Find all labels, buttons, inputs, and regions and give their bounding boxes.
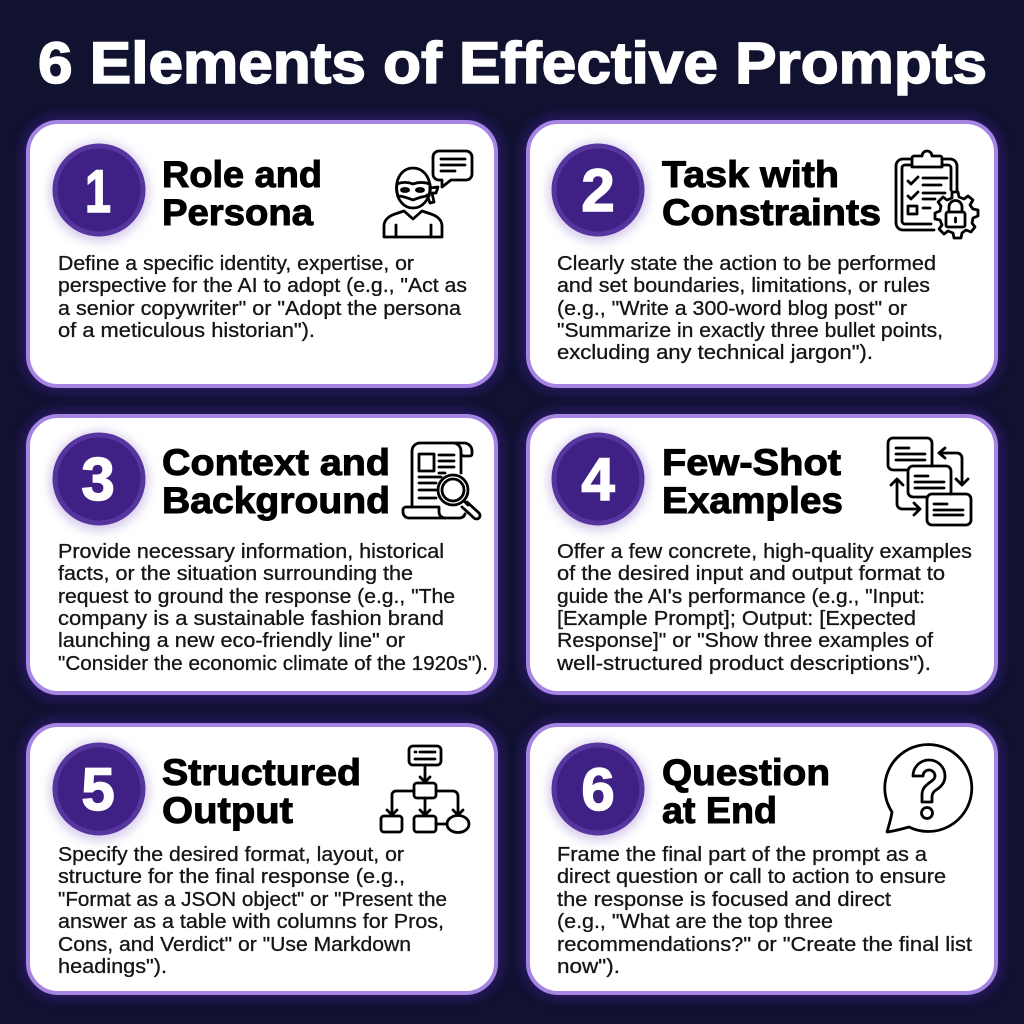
description text: answer as a table with columns for Pros, bbox=[58, 911, 444, 933]
heading: structured output bbox=[162, 752, 361, 831]
description text: facts, or the situation surrounding the bbox=[58, 563, 413, 585]
description text: direct question or call to action to ensure bbox=[557, 866, 946, 888]
description text: structure for the final response (e.g., bbox=[58, 866, 405, 888]
description text: launching a new eco-friendly line" or bbox=[58, 630, 405, 652]
description text: now"). bbox=[557, 956, 620, 978]
description text: Response]" or "Show three examples of bbox=[557, 630, 933, 652]
title: 6 Elements of Effective Prompts bbox=[38, 31, 987, 96]
number badge 5: 5 bbox=[81, 756, 115, 823]
heading: structured output: Output bbox=[162, 790, 293, 831]
description text: Frame the final part of the prompt as a bbox=[557, 844, 928, 866]
description text: (e.g., "Write a 300-word blog post" or bbox=[557, 298, 907, 320]
description text: of a meticulous historian"). bbox=[58, 320, 315, 342]
description text: and set boundaries, limitations, or rules bbox=[557, 275, 930, 297]
panel: structured output bbox=[28, 725, 496, 993]
description text: recommendations?" or "Create the final list bbox=[557, 934, 972, 956]
icon: masked persona with speech bubble bbox=[384, 151, 472, 237]
description text: company is a sustainable fashion brand bbox=[58, 608, 444, 630]
description text: well-structured product descriptions"). bbox=[556, 653, 931, 675]
heading: few-shot examples bbox=[662, 442, 843, 521]
description text: guide the AI's performance (e.g., "Input: bbox=[557, 586, 925, 608]
description text: Specify the desired format, layout, or bbox=[58, 844, 404, 866]
description text bbox=[58, 253, 467, 342]
number badge 3 bbox=[49, 431, 149, 531]
panel: role and persona bbox=[28, 122, 496, 386]
heading: question at end bbox=[662, 752, 830, 831]
description text: headings"). bbox=[58, 956, 167, 978]
icon: question mark speech bubble bbox=[885, 745, 972, 832]
description text: Clearly state the action to be performed bbox=[557, 253, 936, 275]
icon: flowchart bbox=[381, 746, 469, 832]
heading: few-shot examples: Examples bbox=[662, 480, 843, 521]
heading: question at end: at End bbox=[662, 790, 777, 831]
heading: task with constraints bbox=[662, 154, 881, 233]
description text bbox=[557, 253, 943, 364]
description text: excluding any technical jargon"). bbox=[557, 342, 873, 364]
description text: a senior copywriter" or "Adopt the persona bbox=[58, 298, 462, 320]
heading: context and background: Context and bbox=[162, 442, 390, 483]
heading: role and persona: Persona bbox=[162, 192, 313, 233]
heading: structured output: Structured bbox=[162, 752, 361, 793]
description text bbox=[557, 844, 972, 978]
panel: few-shot examples bbox=[528, 416, 996, 693]
number badge 1: 1 bbox=[85, 158, 111, 225]
number badge 3: 3 bbox=[81, 446, 115, 513]
heading: task with constraints: Constraints bbox=[662, 192, 881, 233]
description text: the response is focused and direct bbox=[557, 889, 891, 911]
description text: "Format as a JSON object" or "Present the bbox=[58, 889, 447, 911]
heading: context and background bbox=[162, 442, 390, 521]
description text: Provide necessary information, historical bbox=[58, 541, 444, 563]
description text: "Consider the economic climate of the 1920s"). bbox=[58, 653, 488, 675]
description text: of the desired input and output format to bbox=[557, 563, 945, 585]
heading: role and persona bbox=[162, 154, 322, 233]
description text: [Example Prompt]; Output: [Expected bbox=[557, 608, 916, 630]
number badge 4: 4 bbox=[581, 446, 615, 513]
description text bbox=[58, 541, 488, 675]
heading: context and background: Background bbox=[162, 480, 390, 521]
number badge 4 bbox=[548, 431, 648, 531]
heading: task with constraints: Task with bbox=[662, 154, 839, 195]
number badge 1 bbox=[49, 142, 149, 242]
heading: few-shot examples: Few-Shot bbox=[662, 442, 841, 483]
panel: context and background bbox=[28, 416, 496, 693]
heading: role and persona: Role and bbox=[162, 154, 322, 195]
number badge 2: 2 bbox=[581, 157, 615, 224]
panel: task with constraints bbox=[528, 122, 996, 386]
number badge 6 bbox=[548, 741, 648, 841]
icon: document with magnifying glass bbox=[403, 443, 480, 519]
number badge 2 bbox=[548, 142, 648, 242]
number badge 6: 6 bbox=[581, 756, 615, 823]
description text bbox=[556, 541, 972, 675]
panel: question at end bbox=[528, 725, 996, 993]
description text bbox=[58, 844, 447, 978]
description text: Offer a few concrete, high-quality examples bbox=[557, 541, 972, 563]
description text: Cons, and Verdict" or "Use Markdown bbox=[58, 934, 411, 956]
number badge 5 bbox=[49, 741, 149, 841]
heading: question at end: Question bbox=[662, 752, 830, 793]
description text: "Summarize in exactly three bullet points, bbox=[557, 320, 943, 342]
description text: (e.g., "What are the top three bbox=[557, 911, 833, 933]
icon: linked example cards with arrows bbox=[888, 438, 971, 525]
description text: request to ground the response (e.g., "The bbox=[58, 586, 455, 608]
icon: clipboard checklist with lock gear bbox=[896, 151, 978, 238]
description text: Define a specific identity, expertise, or bbox=[58, 253, 414, 275]
description text: perspective for the AI to adopt (e.g., "Act as bbox=[58, 275, 467, 297]
